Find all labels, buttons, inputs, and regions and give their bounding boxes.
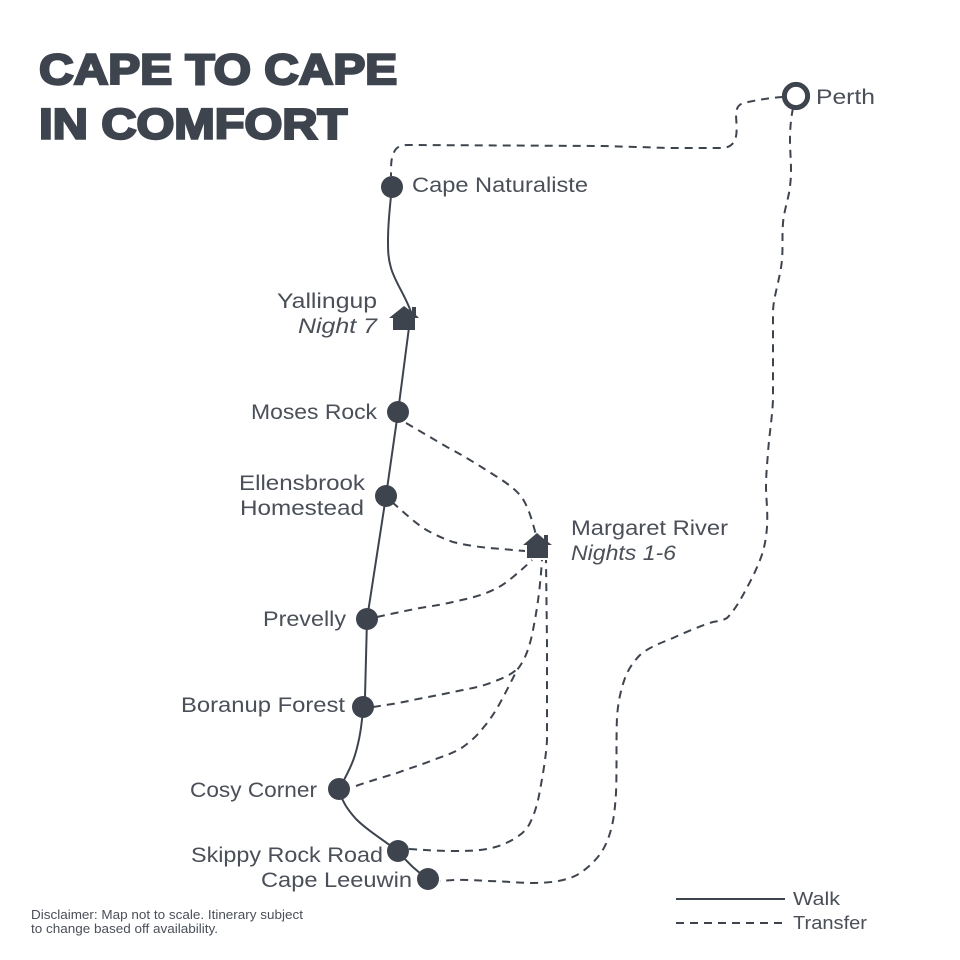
disclaimer: to change based off availability.: [31, 922, 218, 936]
label: Skippy Rock Road: Skippy Rock Road: [191, 844, 383, 867]
disclaimer: [31, 908, 304, 936]
transfer: Skippy Rock Road: [409, 560, 547, 851]
transfer: Ellensbrook: [392, 502, 525, 551]
legend: transfer: Transfer: [793, 912, 867, 933]
legend: walk: Walk: [793, 888, 841, 909]
marker: Ellensbrook: [375, 485, 397, 507]
marker: Boranup: [352, 696, 374, 718]
title: [39, 47, 397, 148]
marker: Cosy Corner: [328, 778, 350, 800]
label: Cape Leeuwin: Cape Leeuwin: [261, 869, 412, 892]
icon: Yallingup house: [389, 306, 419, 330]
marker: Moses Rock: [387, 401, 409, 423]
label: Cosy Corner: Cosy Corner: [190, 779, 317, 802]
label: Boranup Forest: Boranup Forest: [181, 694, 345, 717]
marker: Cape Naturaliste: [381, 176, 403, 198]
label: Nights 1-6: Nights 1-6: [571, 542, 676, 565]
title: IN COMFORT: [39, 101, 347, 148]
title: CAPE TO CAPE: [39, 47, 397, 94]
marker: Cape Leeuwin: [417, 868, 439, 890]
transfer: Moses Rock: [406, 423, 536, 535]
label: Homestead: Homestead: [240, 497, 364, 520]
transfer: Cosy Corner: [356, 560, 542, 786]
marker: Skippy Rock Road: [387, 840, 409, 862]
marker: Prevelly: [356, 608, 378, 630]
label: Perth: Perth: [816, 86, 875, 109]
icon: Margaret River house: [523, 533, 552, 558]
transfer: Perth to Cape Leeuwin: [440, 108, 793, 883]
label: Night 7: Night 7: [298, 315, 379, 338]
label: Margaret River: Margaret River: [571, 517, 728, 540]
label: Yallingup: Yallingup: [277, 290, 377, 313]
transfer: Boranup: [373, 669, 517, 707]
label: Cape Naturaliste: Cape Naturaliste: [412, 174, 588, 197]
label: Prevelly: Prevelly: [263, 608, 347, 631]
disclaimer: Disclaimer: Map not to scale. Itinerary subject: [31, 908, 304, 922]
label: Ellensbrook: Ellensbrook: [239, 472, 366, 495]
icon: Perth ring: [784, 84, 808, 108]
transfer: Prevelly: [377, 560, 532, 617]
legend: [676, 888, 867, 933]
stop markers: [328, 176, 439, 890]
transfer routes: [356, 97, 793, 883]
label: Moses Rock: Moses Rock: [251, 401, 378, 424]
place labels: [181, 86, 875, 892]
walk route: [339, 187, 428, 879]
transfer: Perth to Cape Naturaliste: [391, 97, 783, 176]
